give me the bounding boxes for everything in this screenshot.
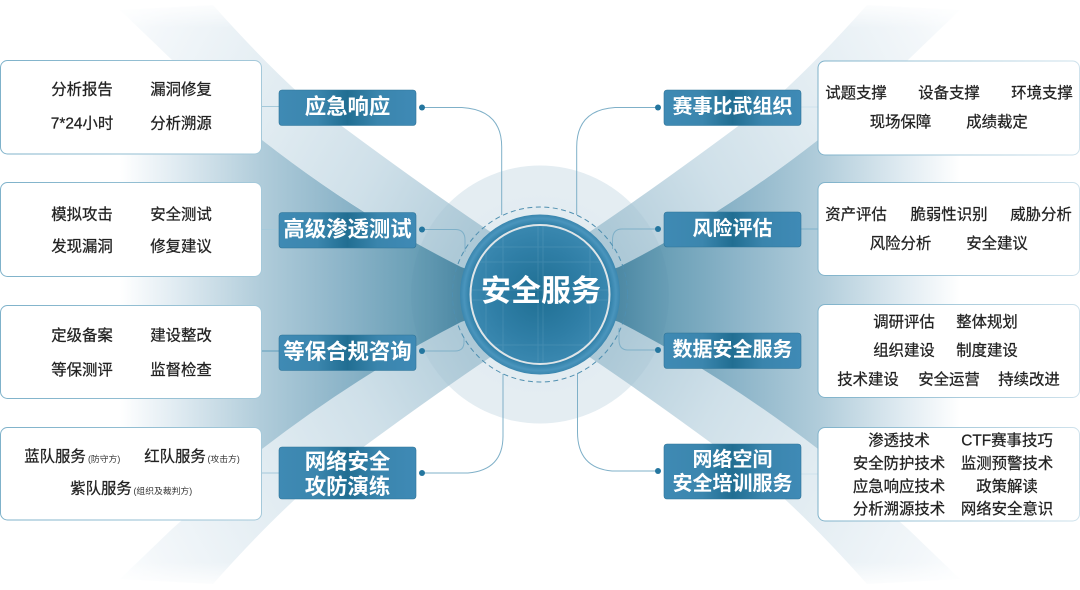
right card 4 with link <box>801 428 1080 521</box>
right card 2 with link: 威胁分析 <box>1010 206 1072 224</box>
label: 赛事比武组织: 赛事比武组织 <box>672 94 792 118</box>
right card 3: 技术建设 <box>837 370 899 388</box>
left card 2 with link: 发现漏洞 <box>51 238 113 256</box>
right card 1 with link: 成绩裁定 <box>966 113 1028 131</box>
left card 4 with link: 紫队服务 <box>70 480 132 498</box>
left card 4 with link: 红队服务 <box>144 448 206 466</box>
left card 2 with link: 模拟攻击 <box>51 206 113 224</box>
connector: 网络安全攻防演练 <box>419 374 503 476</box>
label: 网络空间安全培训服务: 安全培训服务 <box>672 471 792 495</box>
right card 1 with link: 环境支撑 <box>1011 83 1073 102</box>
left card 4 with link <box>0 428 279 520</box>
right card 3 <box>818 304 1080 398</box>
label: 应急响应 <box>279 90 416 126</box>
label: 高级渗透测试: 高级渗透测试 <box>283 216 412 241</box>
left card 4 with link: (攻击方) <box>208 453 240 464</box>
right card 2 with link <box>801 182 1080 276</box>
left card 3 with link <box>0 306 279 398</box>
connector: 赛事比武组织 <box>577 104 661 215</box>
label: 风险评估 <box>664 212 801 247</box>
connector: 应急响应 <box>419 104 502 215</box>
central circle: 安全服务 <box>452 207 628 382</box>
label: 风险评估: 风险评估 <box>692 216 772 240</box>
left card 4 with link: 蓝队服务 <box>24 448 86 466</box>
label: 网络安全攻防演练: 网络安全 <box>305 449 391 474</box>
right card 4 with link: 渗透技术 <box>868 432 930 450</box>
right card 2 with link: 风险分析 <box>870 234 931 252</box>
right card 2 with link: 脆弱性识别 <box>911 206 987 224</box>
label: 网络空间安全培训服务 <box>664 444 801 499</box>
connector: 风险评估 <box>612 226 661 249</box>
left card 4 with link: (组织及裁判方) <box>134 485 192 496</box>
label: 数据安全服务 <box>664 333 801 368</box>
right card 1 with link: 试题支撑 <box>825 84 887 102</box>
left card 1 with link: 7*24小时 <box>51 114 113 132</box>
right card 4 with link: 政策解读 <box>976 478 1038 496</box>
left card 3 with link: 建设整改 <box>150 326 212 344</box>
connector: 网络空间安全培训服务 <box>578 373 661 474</box>
right card 1 with link <box>801 61 1080 155</box>
label: 等保合规咨询 <box>279 335 416 370</box>
right card 3: 组织建设 <box>873 342 935 360</box>
central circle: 安全服务: 安全服务 <box>481 275 601 308</box>
right card 2 with link: 安全建议 <box>966 234 1028 252</box>
right card 3: 安全运营 <box>918 370 980 388</box>
right card 4 with link: CTF赛事技巧 <box>961 430 1053 450</box>
connector: 等保合规咨询 <box>419 337 464 354</box>
label: 网络安全攻防演练: 攻防演练 <box>305 474 390 499</box>
label: 网络空间安全培训服务: 网络空间 <box>692 447 772 471</box>
right card 3: 调研评估 <box>873 313 935 331</box>
left card 2 with link: 修复建议 <box>150 238 212 256</box>
right card 4 with link: 监测预警技术 <box>961 454 1053 472</box>
left card 3 with link: 定级备案 <box>51 326 113 344</box>
right card 1 with link: 设备支撑 <box>918 84 980 102</box>
right card 4 with link: 安全防护技术 <box>853 454 945 472</box>
left card 4 with link: (防守方) <box>88 453 120 464</box>
halo behind central circle <box>411 166 669 424</box>
label: 高级渗透测试 <box>279 212 416 248</box>
left card 1 with link: 分析溯源 <box>150 114 212 132</box>
connector: 数据安全服务 <box>619 328 661 353</box>
label: 等保合规咨询: 等保合规咨询 <box>283 340 412 364</box>
right card 3: 持续改进 <box>998 370 1060 388</box>
right card 1 with link: 现场保障 <box>870 113 931 131</box>
label: 网络安全攻防演练 <box>279 447 416 499</box>
right card 4 with link: 分析溯源技术 <box>853 500 945 518</box>
right card 3: 整体规划 <box>956 313 1018 331</box>
left card 1 with link: 漏洞修复 <box>150 80 212 98</box>
right card 4 with link: 网络安全意识 <box>961 499 1053 518</box>
left card 1 with link: 分析报告 <box>51 80 113 98</box>
connector: 高级渗透测试 <box>419 226 465 252</box>
label: 数据安全服务: 数据安全服务 <box>672 337 792 361</box>
right card 4 with link: 应急响应技术 <box>853 476 945 496</box>
left card 3 with link: 监督检查 <box>150 361 212 379</box>
left card 2 with link: 安全测试 <box>150 206 212 224</box>
right card 3: 制度建设 <box>956 342 1018 360</box>
left card 1 with link <box>0 60 279 154</box>
left card 3 with link: 等保测评 <box>51 361 113 379</box>
label: 应急响应: 应急响应 <box>305 94 390 119</box>
right card 2 with link: 资产评估 <box>825 206 887 224</box>
label: 赛事比武组织 <box>664 90 801 126</box>
halo tint over beams <box>411 166 669 424</box>
left card 2 with link <box>0 182 279 276</box>
